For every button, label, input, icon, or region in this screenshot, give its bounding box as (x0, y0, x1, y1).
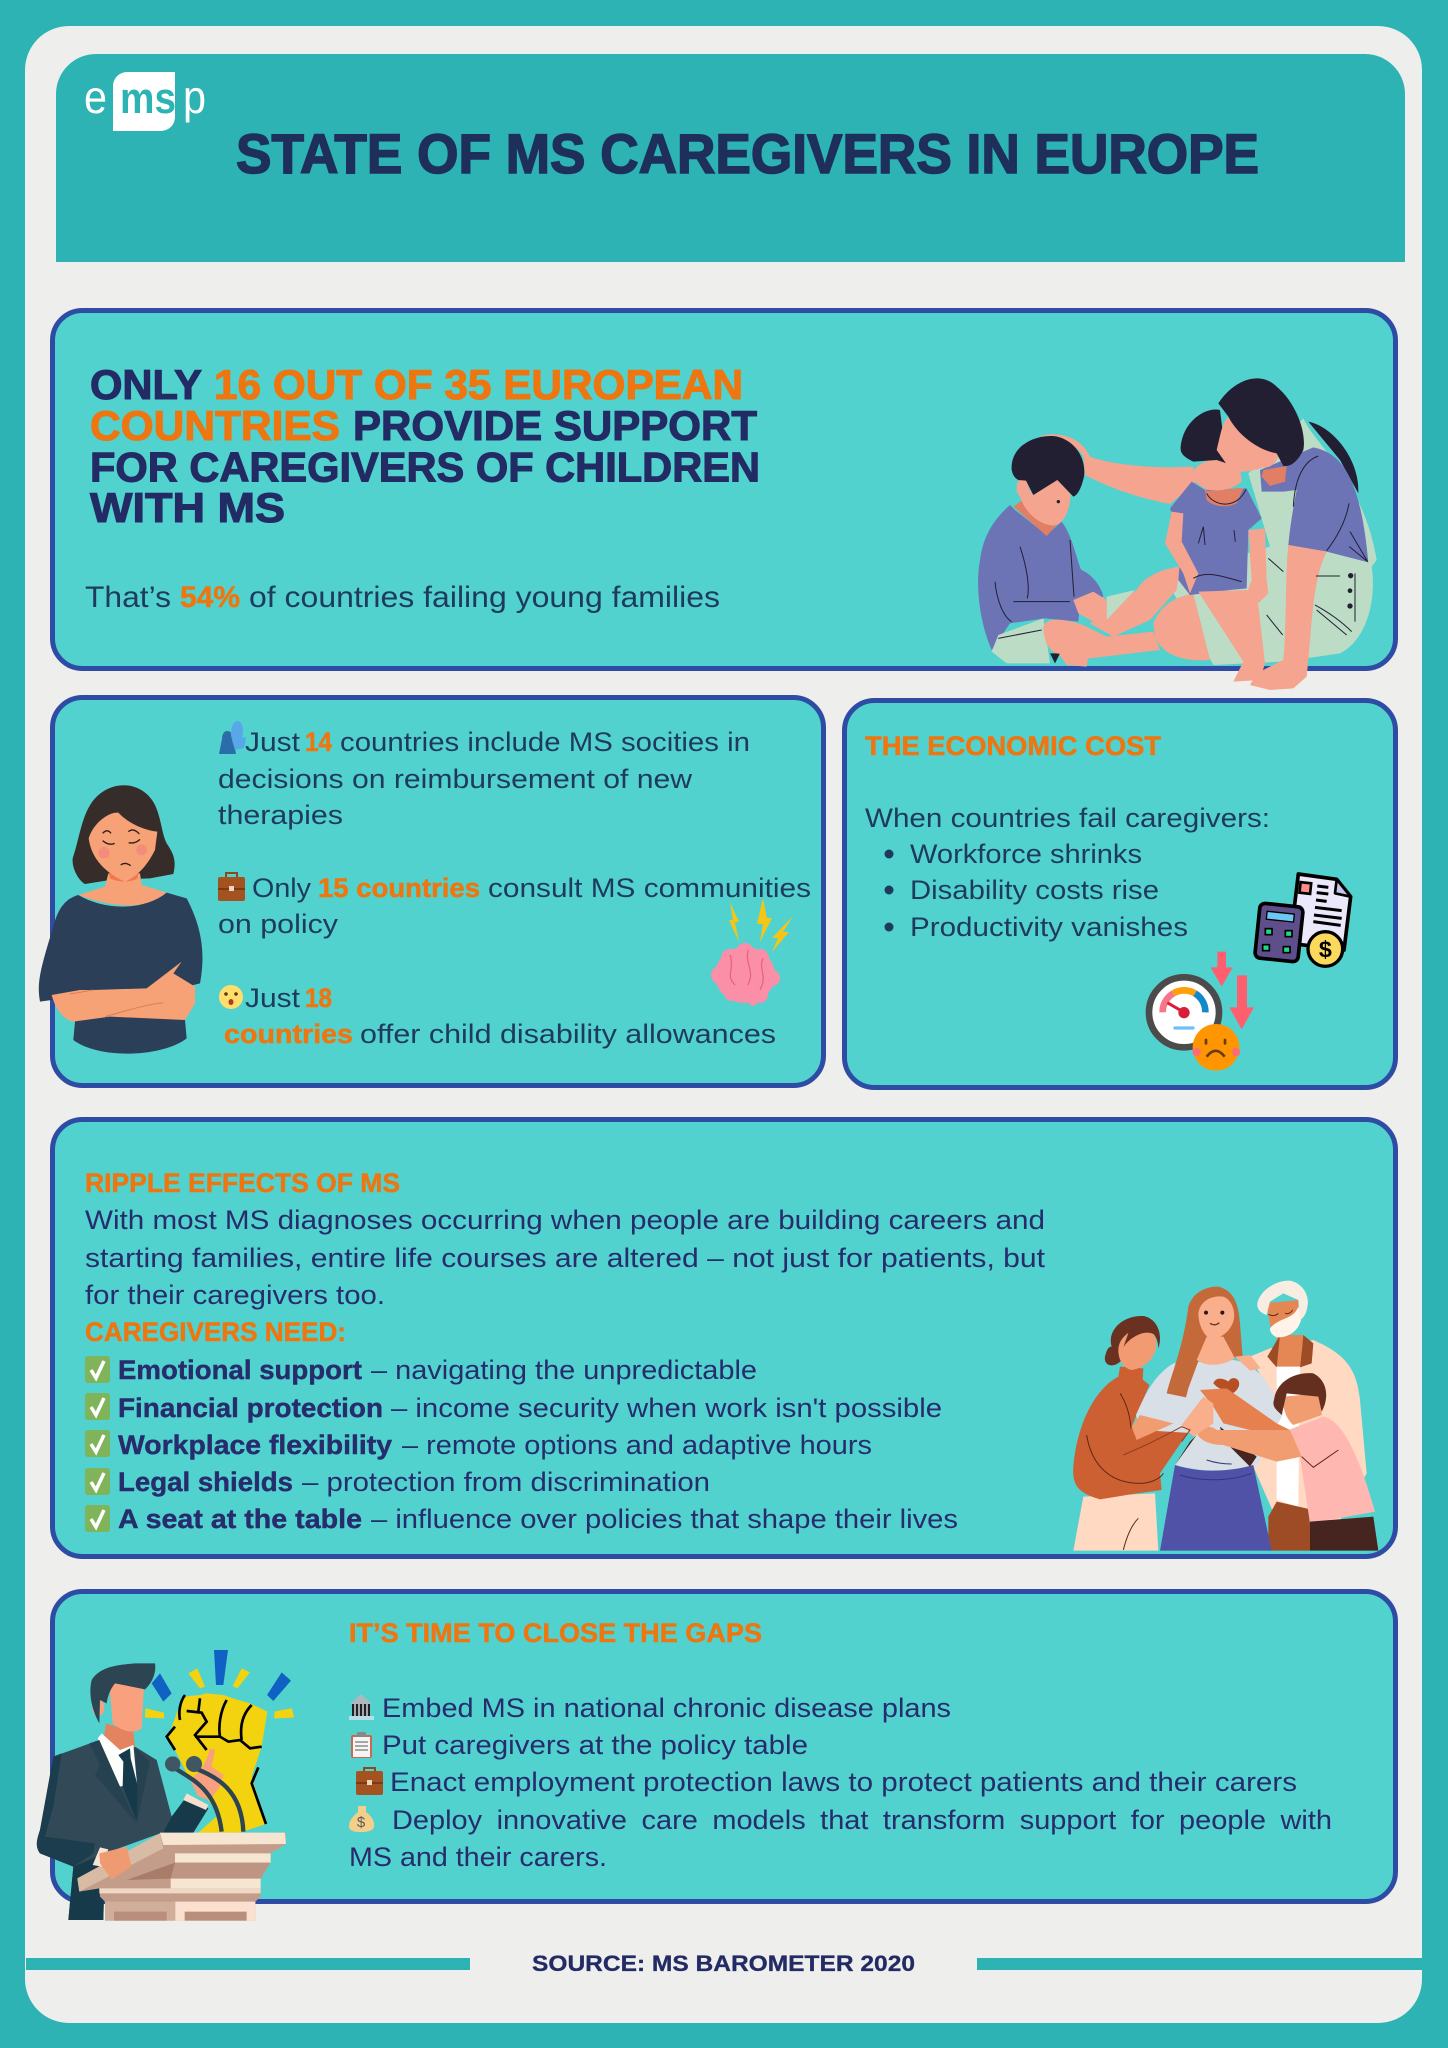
illustration: mother and children (978, 378, 1377, 690)
panel: close the gaps (37, 1592, 1395, 1921)
cost list: When countries fail caregivers: (865, 803, 1270, 833)
statistic line: That’s (85, 581, 171, 614)
icon: brain with lightning (711, 898, 793, 1006)
panel: only 16 of 35 countries (52, 310, 1396, 690)
body text: starting families, entire life courses are altered – not just for patients, but (85, 1243, 1046, 1273)
heading: 16 OUT OF 35 EUROPEAN (214, 361, 743, 408)
cost list: Workforce shrinks (910, 839, 1142, 869)
body text: With most MS diagnoses occurring when people are building careers and (85, 1205, 1045, 1235)
illustration: speaker at podium with raised fist (37, 1650, 294, 1921)
item: emotional support (85, 1355, 757, 1385)
action: innovative care models: Deploy innovative care models that transform support for people with (392, 1805, 1332, 1835)
text: 14 countries: Just (245, 727, 301, 757)
footer source: SOURCE: MS BAROMETER 2020 (532, 1951, 915, 1976)
cost list (865, 803, 1270, 942)
text: 14 countries: 14 (305, 727, 332, 757)
item: emotional support: Emotional support (118, 1355, 362, 1385)
icon: briefcase (218, 873, 245, 901)
illustration: supportive family (1073, 1281, 1378, 1551)
heading: PROVIDE SUPPORT (353, 402, 757, 449)
heading: WITH MS (90, 484, 285, 531)
item: a seat at the table: – influence over policies that shape their lives (371, 1504, 958, 1534)
statistic line (85, 581, 720, 614)
text: 15 countries: on policy (218, 909, 339, 939)
heading: THE ECONOMIC COST (865, 731, 1162, 761)
footer source (26, 1951, 1422, 1976)
action: policy table: Put caregivers at the policy table (382, 1730, 808, 1760)
text: 18 countries: 18 (305, 983, 332, 1013)
text: 14 countries (218, 721, 750, 830)
text: 14 countries: therapies (218, 800, 343, 830)
text: 14 countries: decisions on reimbursement of new (218, 764, 693, 794)
item: emotional support: – navigating the unpredictable (371, 1355, 757, 1385)
item: workplace flexibility (85, 1430, 872, 1460)
title: STATE OF MS CAREGIVERS IN EUROPE (236, 122, 1259, 185)
logo: e (84, 71, 107, 123)
logo: p (183, 71, 206, 123)
text: 15 countries (218, 873, 811, 939)
action: employment protection: Enact employment protection laws to protect patients and their carers (390, 1767, 1297, 1797)
text: 18 countries: Just (245, 983, 301, 1013)
item: legal shields: Legal shields (118, 1467, 293, 1497)
logo: ms (120, 74, 176, 123)
item: legal shields (85, 1467, 710, 1497)
action: innovative care models: $ (357, 1814, 366, 1831)
icon: gauge with sad face and arrows (1149, 952, 1254, 1071)
heading: ONLY (90, 361, 202, 408)
text: 18 countries: offer child disability allowances (360, 1019, 776, 1049)
text: 14 countries: countries include MS socities in (340, 727, 750, 757)
heading: IT’S TIME TO CLOSE THE GAPS (349, 1618, 762, 1648)
item: legal shields: – protection from discrimination (302, 1467, 710, 1497)
illustration: sad woman (39, 785, 202, 1054)
panel: the economic cost (844, 700, 1396, 1088)
text: 18 countries (219, 983, 776, 1049)
item: financial protection: – income security when work isn't possible (391, 1393, 942, 1423)
heading: caregivers need: CAREGIVERS NEED: (85, 1317, 346, 1347)
icon: calculator and invoice: $ (1319, 936, 1332, 962)
statistic line: 54% (180, 581, 240, 614)
item: a seat at the table: A seat at the table (118, 1504, 362, 1534)
action: embed MS: Embed MS in national chronic disease plans (382, 1693, 951, 1723)
heading (90, 361, 760, 531)
text: 15 countries: Only (252, 873, 312, 903)
body text (85, 1205, 1046, 1310)
logo (84, 71, 206, 131)
cost list: Disability costs rise (910, 875, 1159, 905)
icon: baby (219, 985, 243, 1009)
action: innovative care models (349, 1805, 1332, 1872)
item: workplace flexibility: – remote options and adaptive hours (402, 1430, 872, 1460)
item: financial protection (85, 1393, 942, 1423)
text: 18 countries: countries (224, 1019, 353, 1049)
cost list: Productivity vanishes (910, 912, 1188, 942)
heading: COUNTRIES (90, 402, 340, 449)
item: financial protection: Financial protection (118, 1393, 383, 1423)
text: 15 countries: consult MS communities (488, 873, 811, 903)
header banner (56, 54, 1405, 262)
icon: calculator and invoice (1255, 874, 1351, 966)
panel: country statistics (39, 698, 823, 1086)
body text: for their caregivers too. (85, 1280, 385, 1310)
item: workplace flexibility: Workplace flexibility (118, 1430, 392, 1460)
panel: ripple effects of MS (52, 1120, 1396, 1556)
icon: people (219, 721, 246, 754)
heading: FOR CAREGIVERS OF CHILDREN (90, 444, 760, 490)
action: innovative care models: MS and their carers. (349, 1842, 607, 1872)
heading: ripple effects: RIPPLE EFFECTS OF MS (85, 1168, 400, 1198)
action list (349, 1693, 1332, 1872)
text: 15 countries: 15 countries (318, 873, 480, 903)
checklist (85, 1355, 958, 1534)
statistic line: of countries failing young families (249, 581, 720, 614)
item: a seat at the table (85, 1504, 958, 1534)
